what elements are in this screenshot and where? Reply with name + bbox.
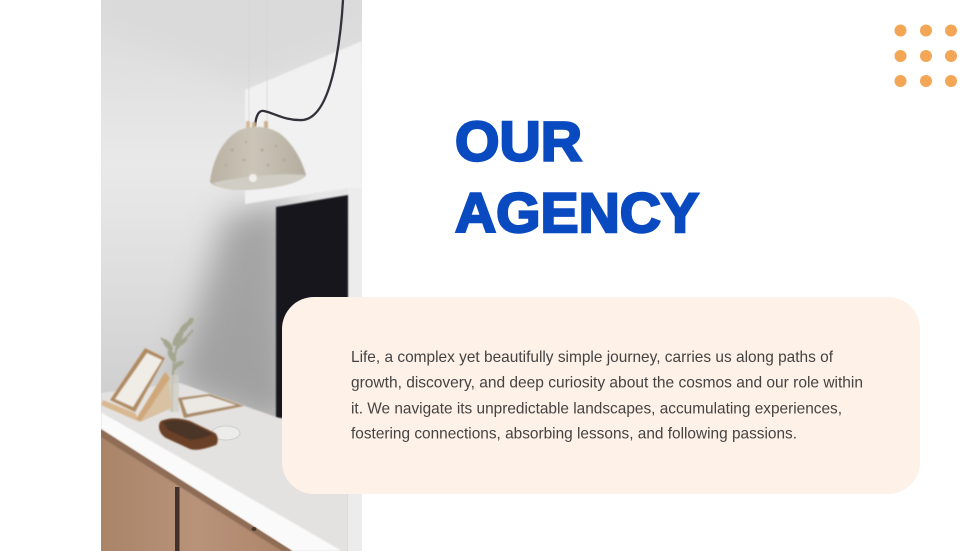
title: AGENCY	[455, 181, 699, 244]
strip beside the dark opening	[348, 188, 362, 551]
body text: it. We navigate its unpredictable landscapes, accumulating experiences,	[351, 400, 842, 418]
body text: growth, discovery, and deep curiosity about the cosmos and our role within	[351, 374, 863, 392]
white wall box	[245, 41, 362, 204]
title	[455, 110, 699, 244]
plant in glass vase	[161, 317, 195, 412]
body text	[351, 349, 863, 442]
pendant lamp	[210, 121, 306, 190]
hanging wires	[248, 80, 268, 122]
wooden cabinet	[101, 429, 292, 551]
leaning picture frame	[101, 348, 172, 422]
decorative dots grid	[894, 24, 957, 87]
photo: interior with pendant lamp and counter	[90, 0, 370, 551]
description card	[282, 297, 920, 494]
wooden tray	[159, 418, 218, 450]
body text: fostering connections, absorbing lessons, and following passions.	[351, 426, 797, 442]
wall background	[101, 0, 362, 551]
ceiling shading	[90, 0, 370, 85]
dark doorway	[276, 195, 348, 418]
counter top	[101, 383, 348, 551]
round plate	[212, 426, 240, 440]
counter front edge	[101, 412, 342, 551]
shaded lower wall	[175, 200, 290, 430]
flat frame on counter	[178, 394, 244, 418]
title: OUR	[455, 110, 582, 172]
body text: Life, a complex yet beautifully simple journey, carries us along paths of	[351, 349, 834, 366]
lamp cable	[255, 0, 343, 126]
